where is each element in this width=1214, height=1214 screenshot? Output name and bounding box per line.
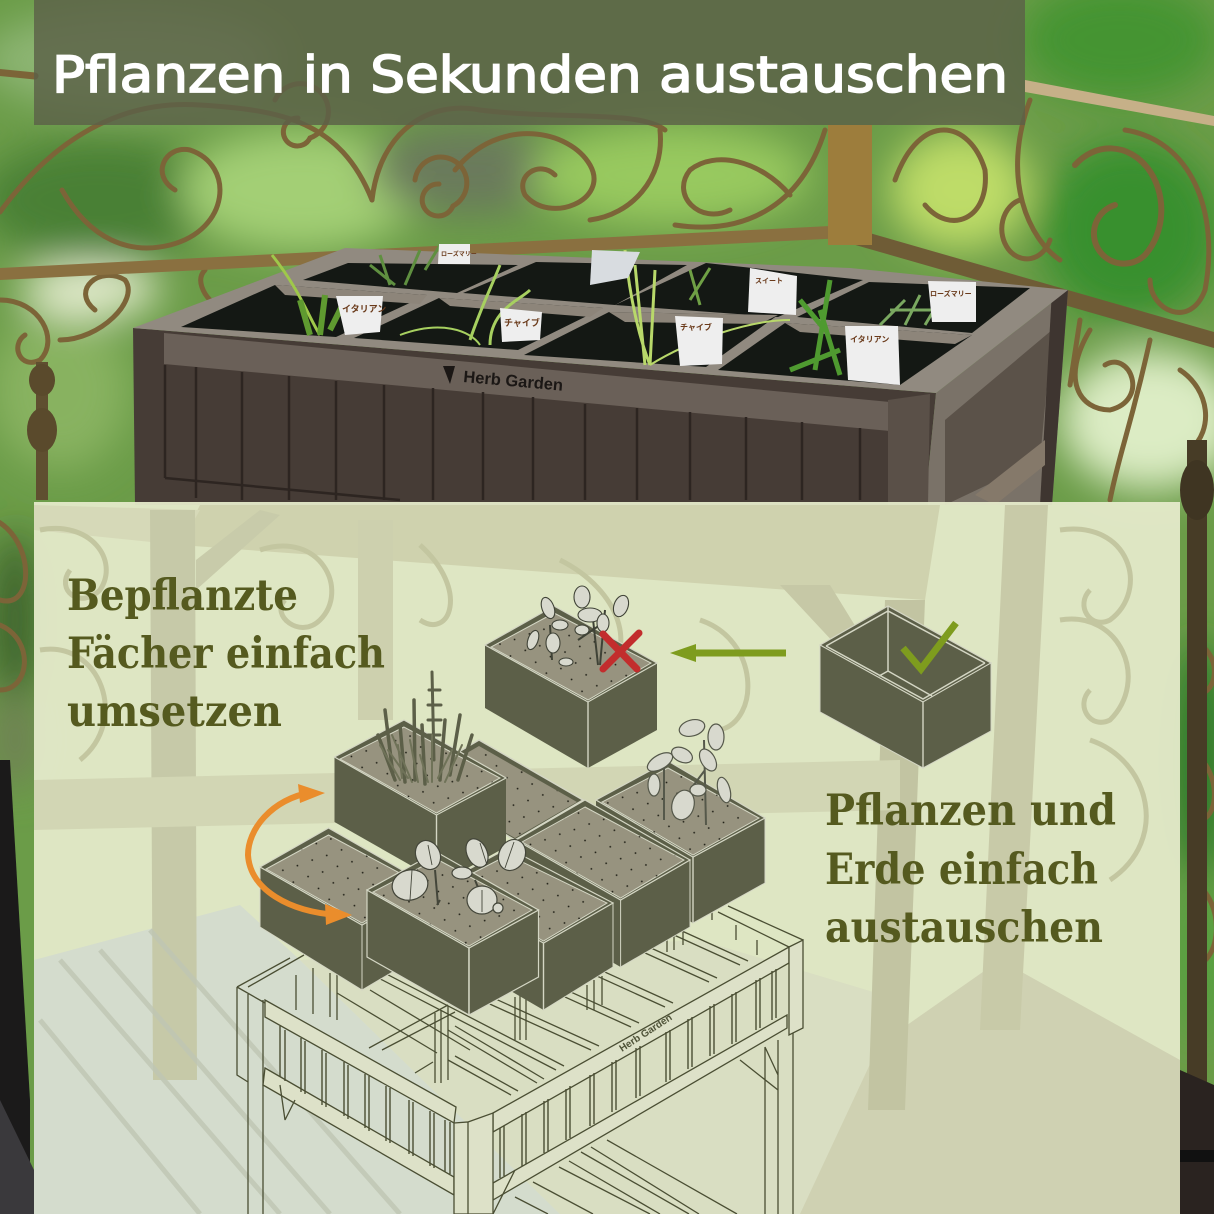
planter upper band [164,333,890,431]
photo: wooden planter box [133,244,1068,505]
box E [440,848,613,1010]
box C [596,761,765,923]
plant labels: チャイブ [680,322,712,332]
left upper rail [265,1000,456,1123]
title: Pflanzen in Sekunden austauschen [52,46,1008,104]
back left rail [237,955,304,987]
plant labels [336,244,976,385]
empty module with green check [820,606,991,768]
bench logo: Herb Garden [618,1012,674,1055]
tray B back [411,740,583,840]
plant labels: イタリアン [342,303,386,314]
heading: pflanzen und erde: Erde einfach [825,845,1098,895]
plant labels: スイート [755,277,783,285]
planter logo: Herb Garden [463,368,564,395]
planter front face [133,328,936,505]
inner posts [296,932,674,1083]
plant labels: ローズマリー [441,250,477,258]
plants in planter [272,245,950,375]
planter slats [165,365,860,500]
right upper rail [493,947,789,1132]
plant: seedling on box F [389,835,531,914]
front corner post [454,1113,493,1214]
plant: mixed herbs [525,586,631,666]
box A: thyme [334,720,506,885]
bench interior slats [336,861,748,1214]
heading: pflanzen und erde: Pflanzen und [825,786,1116,836]
box F: front [367,852,538,1015]
right rail slats [500,969,776,1178]
heading: bepflanzte faecher: Bepflanzte [67,571,298,621]
plant labels: イタリアン [850,334,889,344]
left lower rail [263,1068,454,1195]
planter right face [925,290,1068,505]
plant: thyme [378,672,472,784]
icon: red cross [603,633,639,669]
photo: pergola and floor seen through panel [34,505,1180,1214]
heading: pflanzen und erde: austauschen [825,903,1103,953]
plant labels: ローズマリー [930,289,972,298]
heading: bepflanzte faecher: umsetzen [67,687,282,737]
translucent content panel [34,502,1180,1214]
left rail slats [280,1026,450,1174]
heading: bepflanzte faecher: Fächer einfach [67,629,385,679]
illustration: planting modules [248,672,765,1015]
replaced module with red cross [485,586,657,768]
box D [516,800,690,967]
background photo: iron railing and ornaments [0,72,1214,965]
lower diagonal brace [280,1085,515,1214]
right lower rail [493,1015,787,1200]
planter compartments [181,262,1030,385]
plant labels: チャイブ [504,317,540,328]
orange swap arrow [248,784,352,925]
green arrow [670,644,786,662]
icon: green check [903,623,956,669]
title bar [34,0,1025,125]
right post [789,940,803,1035]
planter top rim [133,248,1068,393]
left post [237,987,265,1214]
inner wood walls [275,285,972,344]
back right rail [683,905,803,955]
box G [260,828,430,990]
illustration: raised bed wireframe [237,861,803,1214]
plant: basil on box C [644,717,733,825]
